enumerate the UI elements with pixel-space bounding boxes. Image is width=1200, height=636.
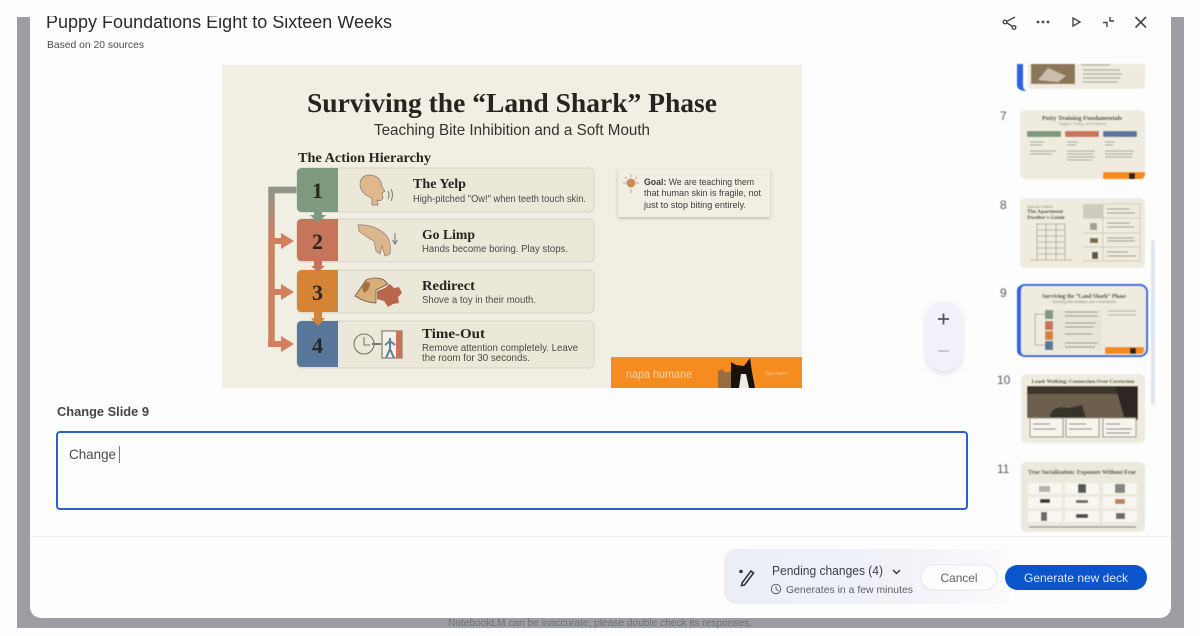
escalation bracket arrows <box>268 190 297 352</box>
icon: lightbulb <box>623 174 639 193</box>
section heading: The Action Hierarchy <box>298 151 431 166</box>
icon: play <box>1073 18 1080 26</box>
thumbnail 9: selected: Surviving the “Land Shark” Phase <box>1042 293 1126 300</box>
step 4 description: Remove attention completely. Leave <box>422 343 578 354</box>
icon: close <box>1136 17 1146 28</box>
thumbnail 9: selected: Teaching Bite Inhibition and a Soft Mouth <box>1052 300 1116 304</box>
slide title: Surviving the “Land Shark” Phase <box>307 88 717 118</box>
slide number 9: 9 <box>1000 286 1007 300</box>
icon: cat <box>718 369 735 388</box>
slide number 11: 11 <box>997 462 1010 476</box>
step 1: the yelp: The Yelp <box>413 177 466 192</box>
thumbnail 8: apartment guide: The Apartment <box>1027 209 1063 215</box>
icon: clock and exit door <box>354 331 402 358</box>
step 3: redirect: Redirect <box>422 279 475 294</box>
slide preview <box>222 65 802 388</box>
callout: goal <box>618 169 770 217</box>
step 1: the yelp: High-pitched "Ow!" when teeth touch skin. <box>413 194 586 205</box>
cancel button <box>921 565 997 590</box>
bottom divider <box>30 536 1171 537</box>
thumbnail 7: potty training <box>1020 110 1145 179</box>
sources note: Based on 20 sources <box>47 39 144 51</box>
step 2: go limp <box>297 219 594 262</box>
thumbnail 8: apartment guide <box>1020 198 1145 268</box>
banner fine print: Napa Humane <box>766 371 788 377</box>
thumbnail 6 <box>1016 63 1146 92</box>
thumbnail 11: socialization: True Socialization: Exposure Without Fear <box>1028 470 1136 476</box>
slide background <box>222 65 802 388</box>
thumbnail 10: leash walking: Leash Walking: Connection Over Correction <box>1032 379 1134 385</box>
pending changes bar: Generates in a few minutes <box>786 584 913 596</box>
toolbar icons <box>1003 17 1146 29</box>
pending changes bar <box>724 549 1010 604</box>
step 2: go limp: Hands become boring. Play stops. <box>422 244 568 255</box>
callout: goal: just to stop biting entirely. <box>643 200 746 211</box>
step 3: redirect: 3 <box>312 280 323 305</box>
step 2: go limp: 2 <box>312 229 323 254</box>
thumbnail 8: apartment guide: Special Edition <box>1027 204 1053 209</box>
icon: head yelling <box>360 175 392 205</box>
step 4: time-out <box>297 321 594 368</box>
step 1: the yelp <box>297 168 594 212</box>
thumbnail 7: potty training: Triggers, Timing, and Patience <box>1058 122 1106 126</box>
step 4: time-out: 4 <box>312 333 323 358</box>
slide thumbnails rail <box>997 55 1155 532</box>
icon: magic pencil <box>740 570 754 586</box>
thumbnail 8: apartment guide: Dweller's Guide <box>1027 215 1065 221</box>
footer banner: napa humane <box>611 357 802 388</box>
step 4: time-out: Time-Out <box>422 327 485 342</box>
slide number 7: 7 <box>1000 109 1007 123</box>
text input: Change <box>69 446 116 462</box>
footer banner: napa humane: napa humane <box>626 367 692 381</box>
text input <box>57 432 967 509</box>
zoom control <box>926 302 962 371</box>
slide number 10: 10 <box>997 373 1011 387</box>
step 1: the yelp: 1 <box>312 178 323 203</box>
icon: limp hand <box>358 225 398 256</box>
deck title: Puppy Foundations Eight to Sixteen Weeks <box>46 11 392 32</box>
thumbnail scrollbar <box>1151 240 1155 405</box>
slide number 8: 8 <box>1000 198 1007 212</box>
generate new deck button: Generate new deck <box>1024 571 1129 585</box>
connector arrows between steps <box>310 212 326 326</box>
icon: chevron <box>893 570 900 574</box>
step 4 description <box>422 343 578 364</box>
icon: dog with toy <box>355 278 402 307</box>
icon: clock <box>771 584 781 594</box>
step 4 description: the room for 30 seconds. <box>422 353 530 364</box>
thumbnail 7: potty training: Potty Training Fundamentals <box>1042 116 1123 122</box>
cancel button: Cancel <box>940 571 978 585</box>
step 3: redirect: Shove a toy in their mouth. <box>422 295 536 306</box>
callout: goal: that human skin is fragile, not <box>644 188 761 199</box>
generate new deck button <box>1005 565 1147 590</box>
slide subtitle: Teaching Bite Inhibition and a Soft Mouth <box>374 122 650 139</box>
pending changes bar: Pending changes (4) <box>772 564 883 578</box>
icon: share <box>1003 17 1016 29</box>
thumbnail 10: leash walking <box>1021 374 1145 443</box>
callout: goal: Goal: We are teaching them <box>644 177 754 188</box>
step 2: go limp: Go Limp <box>422 228 475 243</box>
step 3: redirect <box>297 270 594 313</box>
disclaimer footer: NotebookLM can be inaccurate, please double check its responses. <box>448 618 752 629</box>
icon: more <box>1037 21 1049 23</box>
thumbnail 9: selected <box>1017 285 1147 356</box>
slide editor heading: Change Slide 9 <box>57 404 149 419</box>
icon: dog <box>731 358 755 388</box>
thumbnail 11: socialization <box>1021 462 1145 532</box>
icon: collapse <box>1103 17 1114 27</box>
